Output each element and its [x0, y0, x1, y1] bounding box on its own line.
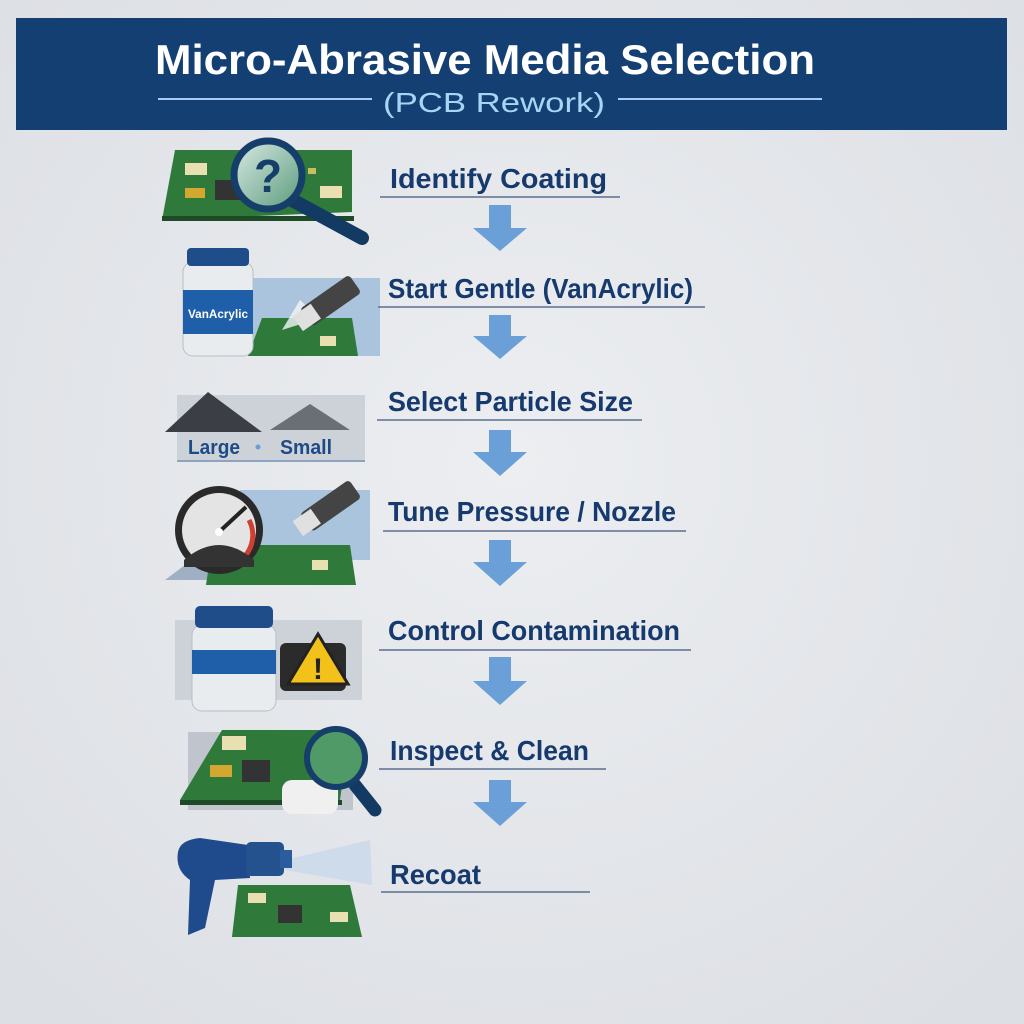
step 1 icon: PCB with magnifier: ?: [254, 150, 282, 202]
step 7 label: Recoat: [390, 859, 481, 890]
step 2 icon: VanAcrylic jar and nozzle: [183, 248, 380, 356]
arrow 3: [473, 430, 527, 476]
step 5 icon: jar with warning: !: [313, 653, 323, 686]
step 1 icon: PCB with magnifier: [162, 141, 362, 238]
step 5 label: Control Contamination: [388, 615, 680, 646]
step 7 icon: spray gun and PCB: [178, 838, 372, 937]
subtitle: (PCB Rework): [383, 87, 605, 118]
step 6 icon: PCB with magnifier and brush: [180, 729, 375, 814]
arrow 6: [473, 780, 527, 826]
step 4 label: Tune Pressure / Nozzle: [388, 496, 676, 527]
step 1 label: Identify Coating: [390, 163, 607, 194]
header banner: [16, 18, 1007, 130]
step 5 icon: jar with warning: [175, 606, 362, 711]
arrow 1: [473, 205, 527, 251]
arrow 2: [473, 315, 527, 359]
step 3 label: Select Particle Size: [388, 386, 633, 417]
step 2 label: Start Gentle (VanAcrylic): [388, 273, 693, 304]
step 3 icon: particle piles: Large: [188, 437, 240, 459]
step 3 icon: particle piles: [165, 392, 365, 461]
step 6 label: Inspect & Clean: [390, 735, 589, 766]
step 4 icon: gauge and nozzle: [165, 480, 370, 585]
step 2 icon: VanAcrylic jar and nozzle: VanAcrylic: [188, 307, 248, 321]
arrow 5: [473, 657, 527, 705]
step 3 icon: particle piles: Small: [280, 437, 332, 459]
title: Micro-Abrasive Media Selection: [155, 36, 815, 83]
arrow 4: [473, 540, 527, 586]
